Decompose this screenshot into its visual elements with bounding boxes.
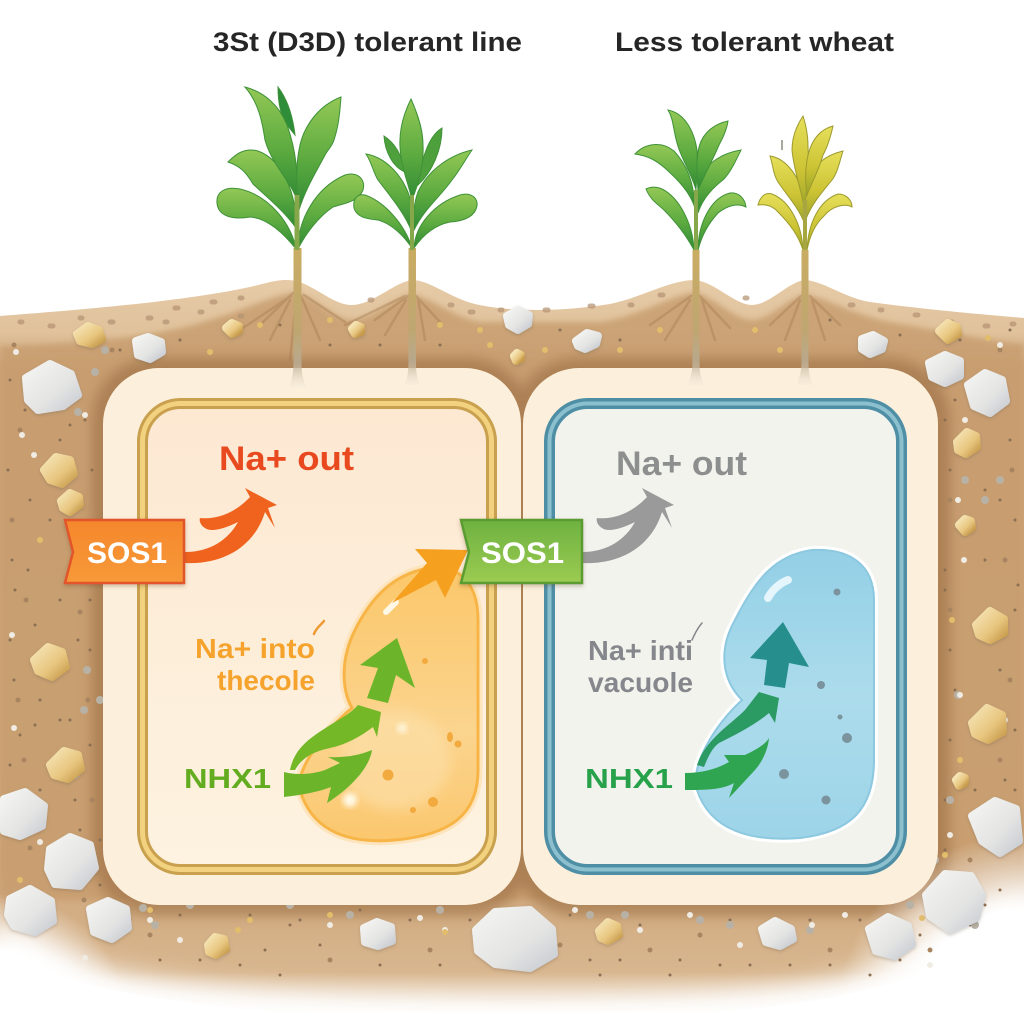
heading: tolerant line: 3St (D3D) tolerant line	[213, 27, 522, 57]
heading: less tolerant wheat: Less tolerant wheat	[615, 27, 894, 57]
membrane	[142, 404, 492, 870]
plant 1	[217, 87, 364, 387]
plant 3	[635, 110, 746, 385]
rocks	[4, 310, 1019, 968]
arrow: NHX1 middle	[697, 692, 779, 767]
label: Na+ out: Na+ out	[219, 440, 354, 478]
root smudges in cell	[696, 385, 805, 425]
cell wall	[523, 368, 938, 905]
stray mark near grey label	[692, 623, 702, 640]
arrow: orange to SOS1	[392, 549, 468, 603]
arrow: NHX1 middle	[290, 705, 381, 770]
plant 2	[354, 99, 477, 385]
membrane	[550, 404, 902, 870]
label: NHX1 green: NHX1	[585, 763, 673, 794]
vacuole: blue	[696, 550, 874, 839]
SOS1 banner orange: SOS1	[87, 537, 167, 570]
soil cross-section	[0, 280, 1024, 1024]
label: Na+ into vacuole	[195, 633, 315, 696]
stray mark near label	[314, 621, 324, 634]
arrow: NHX1 lower	[284, 750, 372, 803]
darker subsoil band	[0, 292, 1024, 900]
soil specks	[8, 320, 1018, 975]
cell wall	[103, 368, 521, 905]
label: Na+ into vacuole: Na+ into	[195, 633, 315, 664]
label: Na+ out grey: Na+ out	[616, 445, 747, 483]
root furrows	[240, 293, 840, 360]
SOS1 banner orange	[65, 520, 184, 583]
panel: less tolerant cell	[523, 368, 938, 905]
arrow: Na+ out orange	[185, 488, 277, 563]
soil fade at bottom	[0, 830, 1024, 1024]
SOS1 banner green: SOS1	[481, 537, 564, 570]
cell wall shadow	[92, 358, 950, 916]
vacuole: yellow	[299, 567, 478, 841]
arrow: NHX1 upper	[360, 638, 415, 703]
arrow: NHX1 upper	[750, 622, 809, 688]
root smudges in cell	[297, 385, 412, 436]
arrow: Na+ out grey	[582, 488, 674, 563]
label: Na+ into vacuole grey	[588, 635, 693, 698]
soil body	[0, 280, 1024, 1020]
label: Na+ into vacuole grey: vacuole	[588, 667, 693, 698]
label: NHX1: NHX1	[184, 763, 271, 794]
label: Na+ into vacuole: thecole	[217, 665, 315, 696]
panel: tolerant cell	[103, 368, 521, 905]
SOS1 banner green	[461, 520, 582, 583]
plant 4	[758, 116, 852, 385]
label: Na+ into vacuole grey: Na+ inti	[588, 635, 693, 666]
top band blotches	[20, 295, 1014, 326]
arrow: NHX1 lower	[685, 738, 769, 798]
